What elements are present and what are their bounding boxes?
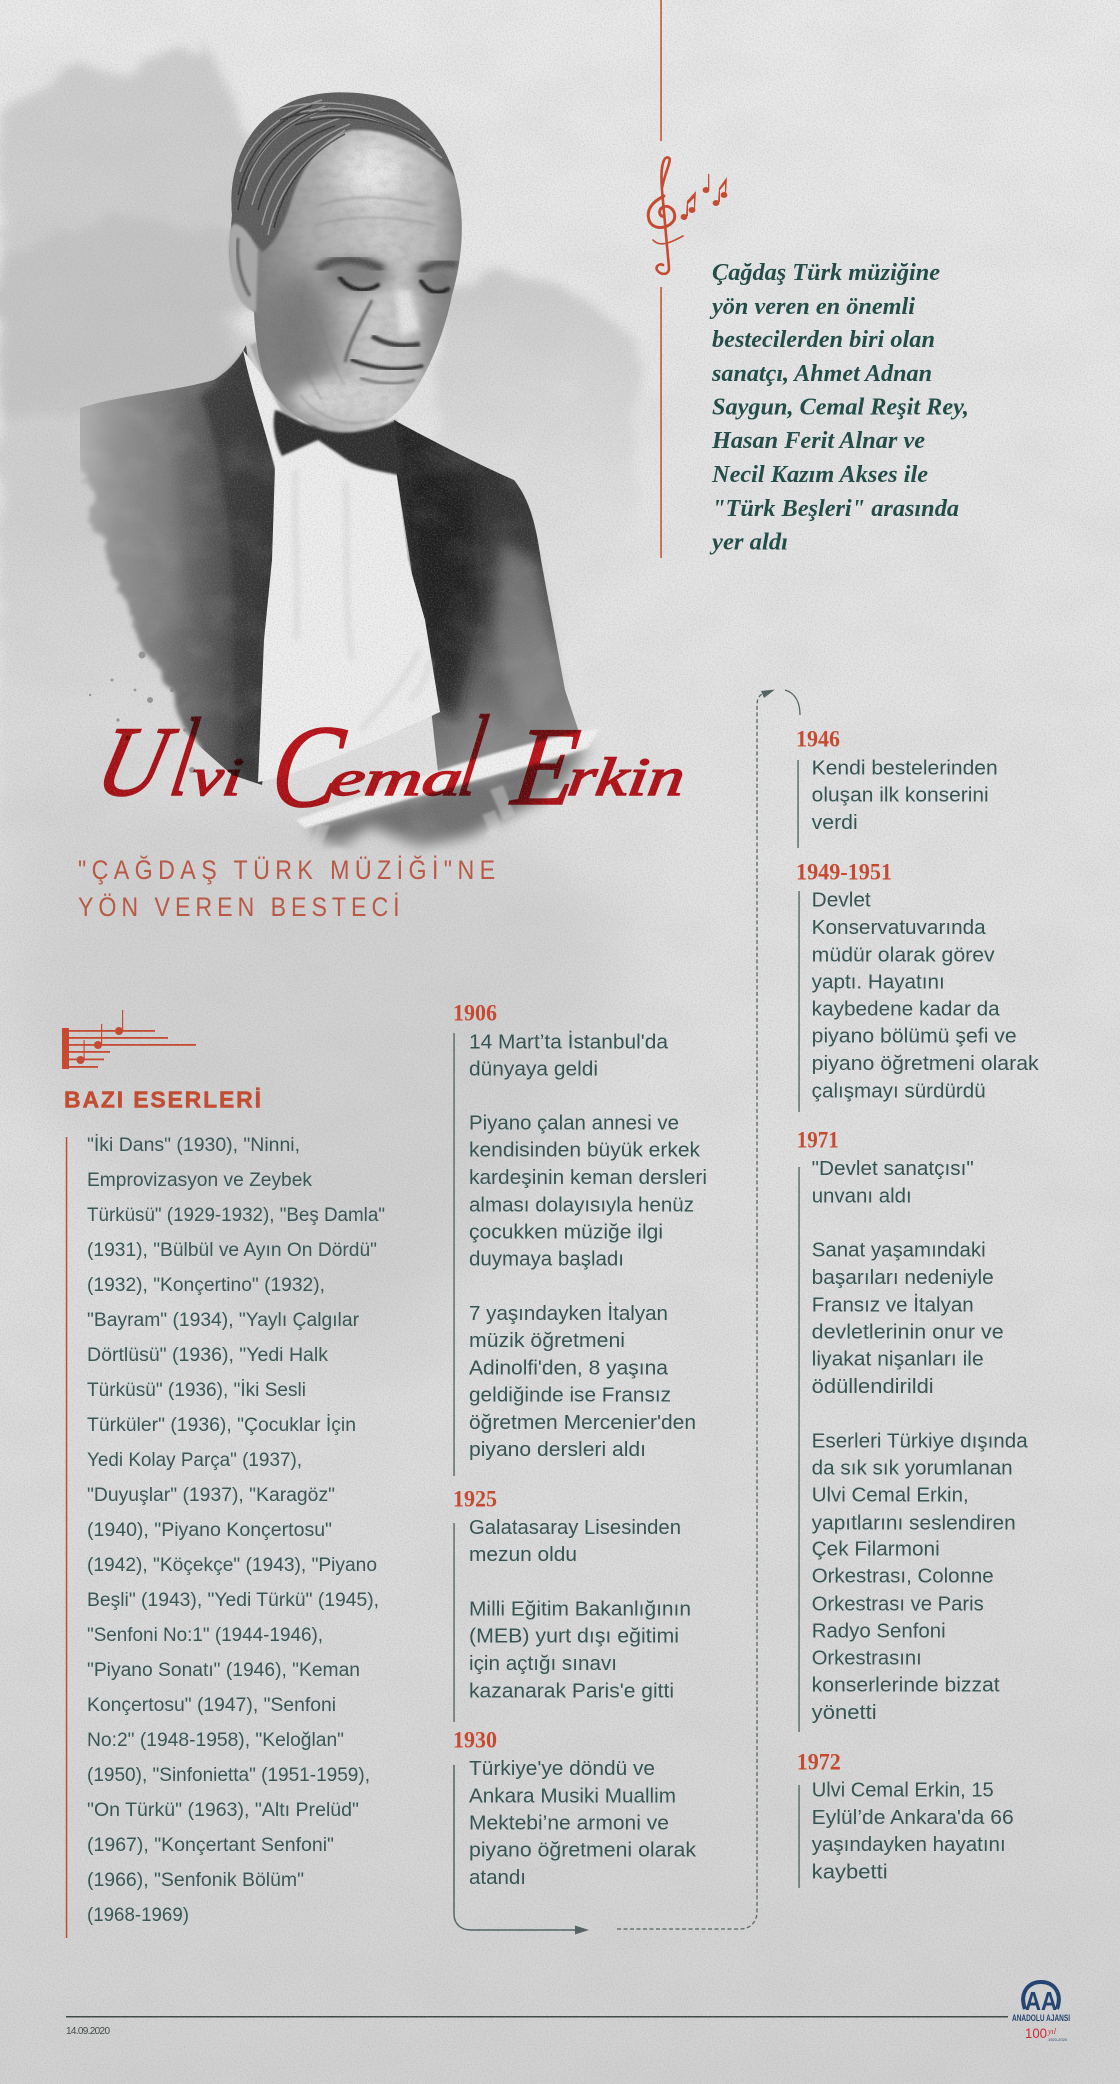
timeline entry 1906: Adinolfi'den, 8 yaşına (469, 1356, 669, 1379)
timeline entry 1949-1951: Konservatuvarında (812, 916, 986, 939)
timeline entry 1972: kaybetti (812, 1860, 888, 1883)
timeline entry 1906: dünyaya geldi (469, 1058, 598, 1081)
timeline entry 1971: Orkestrası ve Paris (812, 1592, 984, 1615)
subtitle (78, 854, 495, 922)
intro quote: yer aldı (709, 530, 788, 556)
panel: works list: (1931), "Bülbül ve Ayın On Dördü" (87, 1240, 377, 1261)
timeline entry 1906: geldiğinde ise Fransız (469, 1384, 671, 1407)
timeline entry 1972: Eylül’de Ankara'da 66 (812, 1806, 1014, 1829)
mouth (352, 360, 422, 369)
eyebrows and eyes (320, 260, 380, 268)
timeline entry 1906: piyano dersleri aldı (469, 1438, 646, 1461)
panel: works list: Türküler" (1936), "Çocuklar İçin (87, 1415, 356, 1436)
panel: works list: "Piyano Sonatı" (1946), "Keman (87, 1660, 360, 1681)
panel: works list: "İki Dans" (1930), "Ninni, (87, 1135, 300, 1156)
intro quote: Necil Kazım Akses ile (711, 462, 928, 488)
subtitle: YÖN VEREN BESTECİ (78, 891, 400, 922)
panel: works list: Konçertosu" (1947), "Senfoni (87, 1695, 336, 1716)
timeline entry 1925: için açtığı sınavı (469, 1652, 617, 1675)
timeline entry 1925: 1925 (453, 1487, 497, 1512)
neck (250, 340, 300, 420)
timeline entry 1906: 14 Mart’ta İstanbul'da (469, 1030, 669, 1053)
title: U (87, 706, 185, 817)
panel: works list: No:2" (1948-1958), "Keloğlan" (87, 1730, 344, 1751)
panel: works list: (1950), "Sinfonietta" (1951-1959), (87, 1765, 370, 1786)
timeline entry 1946: 1946 (796, 727, 840, 752)
timeline entry 1971: Eserleri Türkiye dışında (812, 1429, 1028, 1452)
panel: works list: (1940), "Piyano Konçertosu" (87, 1520, 332, 1541)
jacket and shirt body (60, 345, 620, 860)
vertical red rule top (660, 0, 662, 558)
timeline entry 1930: Mektebi’ne armoni ve (469, 1811, 669, 1834)
title (87, 692, 689, 832)
title: l (451, 692, 496, 821)
timeline entry 1930: atandı (469, 1866, 526, 1889)
timeline entry 1930: Türkiye'ye döndü ve (469, 1757, 655, 1780)
timeline entry 1971: yönetti (812, 1701, 877, 1724)
timeline entry 1971: Orkestrasını (812, 1647, 922, 1670)
intro quote: bestecilerden biri olan (712, 327, 935, 353)
timeline entry 1925: Milli Eğitim Bakanlığının (469, 1598, 691, 1621)
nose (395, 290, 420, 336)
icon: music staff (62, 1010, 196, 1069)
ink wash (0, 40, 640, 1380)
panel: works list: Yedi Kolay Parça" (1937), (87, 1450, 302, 1471)
panel: works list (66, 1135, 385, 1938)
panel: works list: Türküsü" (1936), "İki Sesli (87, 1380, 306, 1401)
timeline entry 1971: yapıtlarını seslendiren (812, 1511, 1016, 1534)
timeline entry 1906: kardeşinin keman dersleri (469, 1166, 707, 1189)
timeline entry 1971: "Devlet sanatçısı" (812, 1157, 974, 1180)
logo: Anadolu Ajansı: yıl (1047, 2027, 1057, 2036)
hands (310, 785, 515, 852)
timeline entry 1906 (453, 1001, 707, 1476)
title: ema (326, 750, 466, 806)
panel: works list: Dörtlüsü" (1936), "Yedi Halk (87, 1345, 329, 1366)
timeline entry 1925: kazanarak Paris'e gitti (469, 1679, 674, 1702)
bow tie (274, 410, 398, 475)
intro quote: Hasan Ferit Alnar ve (711, 428, 925, 454)
panel: works list: Emprovizasyon ve Zeybek (87, 1170, 312, 1191)
timeline entry 1971: Orkestrası, Colonne (812, 1565, 994, 1588)
intro quote: Çağdaş Türk müziğine (712, 260, 940, 286)
panel: works list: "On Türkü" (1963), "Altı Prelüd" (87, 1800, 359, 1821)
arrow: dashed timeline connector (617, 690, 800, 1929)
timeline entry 1930 (453, 1727, 697, 1889)
timeline entry 1972: 1972 (797, 1749, 841, 1774)
timeline entry 1906: Piyano çalan annesi ve (469, 1111, 679, 1134)
timeline entry 1930: 1930 (453, 1727, 497, 1752)
timeline entry 1930: Ankara Musiki Muallim (469, 1784, 676, 1807)
timeline entry 1949-1951: çalışmayı sürdürdü (812, 1079, 986, 1102)
title: E (505, 705, 586, 829)
timeline entry 1971: Çek Filarmoni (812, 1538, 940, 1561)
title: vi (188, 747, 247, 807)
timeline entry 1949-1951: müdür olarak görev (812, 943, 995, 966)
timeline entry 1971: Ulvi Cemal Erkin, (812, 1484, 969, 1507)
timeline entry 1925: mezun oldu (469, 1543, 577, 1566)
timeline entry 1925: (MEB) yurt dışı eğitimi (469, 1625, 679, 1648)
footer rule and date: 14.09.2020 (66, 2026, 110, 2037)
icon: treble clef and notes (648, 157, 727, 274)
timeline entry 1971: unvanı aldı (812, 1184, 912, 1207)
ink splatter (89, 598, 195, 773)
intro quote: yön veren en önemli (709, 294, 915, 320)
timeline entry 1906: öğretmen Mercenier'den (469, 1411, 696, 1434)
timeline entry 1971: liyakat nişanları ile (812, 1348, 984, 1371)
panel: works list: "Duyuşlar" (1937), "Karagöz" (87, 1485, 335, 1506)
panel: works list: (1968-1969) (87, 1905, 189, 1926)
timeline entry 1946: verdi (812, 811, 858, 834)
paper band (296, 728, 600, 828)
timeline entry 1971: da sık sık yorumlanan (812, 1456, 1013, 1479)
title: l (163, 696, 207, 820)
logo: Anadolu Ajansı: 100 (1025, 2025, 1047, 2041)
panel: works list: "Bayram" (1934), "Yaylı Çalgılar (87, 1310, 360, 1331)
timeline entry 1949-1951: piyano bölümü şefi ve (812, 1025, 1017, 1048)
panel: works list: Beşli" (1943), "Yedi Türkü" (1945), (87, 1590, 379, 1611)
panel: works list: (1967), "Konçertant Senfoni" (87, 1835, 334, 1856)
heading: Bazı Eserleri: BAZI ESERLERİ (64, 1086, 261, 1112)
timeline entry 1906: alması dolayısıyla henüz (469, 1193, 694, 1216)
timeline entry 1949-1951: piyano öğretmeni olarak (812, 1052, 1039, 1075)
subtitle: "ÇAĞDAŞ TÜRK MÜZİĞİ"NE (78, 854, 495, 885)
ear (229, 224, 258, 312)
timeline entry 1971: 1971 (797, 1127, 839, 1152)
timeline entry 1949-1951: yaptı. Hayatını (812, 970, 945, 993)
logo: Anadolu Ajansı (1012, 1982, 1070, 2042)
panel: works list: (1966), "Senfonik Bölüm" (87, 1870, 304, 1891)
panel: works list: Türküsü" (1929-1932), "Beş Damla" (87, 1205, 385, 1226)
timeline entry 1930: piyano öğretmeni olarak (469, 1839, 697, 1862)
arrow: solid timeline connector (454, 1765, 589, 1934)
hair (228, 88, 462, 252)
panel: works list: (1942), "Köçekçe" (1943), "Piyano (87, 1555, 377, 1576)
timeline entry 1971: konserlerinde bizzat (812, 1674, 1000, 1697)
portrait photograph (60, 85, 620, 860)
title: rkin (564, 747, 689, 807)
timeline entry 1972: yaşındayken hayatını (812, 1833, 1006, 1856)
timeline entry 1972: Ulvi Cemal Erkin, 15 (812, 1779, 994, 1802)
intro quote (709, 260, 969, 556)
timeline entry 1946: oluşan ilk konserini (812, 784, 989, 807)
intro quote: Saygun, Cemal Reşit Rey, (712, 394, 969, 420)
timeline entry 1971: Sanat yaşamındaki (812, 1239, 986, 1262)
timeline entry 1949-1951: Devlet (812, 889, 871, 912)
head (229, 92, 462, 434)
timeline entry 1906: müzik öğretmeni (469, 1329, 625, 1352)
panel: works list: "Senfoni No:1" (1944-1946), (87, 1625, 323, 1646)
logo: Anadolu Ajansı: AA (1025, 1986, 1057, 2016)
logo: Anadolu Ajansı: ANADOLU AJANSI (1012, 2013, 1070, 2024)
timeline entry 1971: Radyo Senfoni (812, 1620, 946, 1643)
wrinkles (290, 198, 435, 423)
title: C (264, 701, 352, 832)
timeline entry 1949-1951 (796, 859, 1039, 1112)
intro quote: sanatçı, Ahmet Adnan (711, 361, 932, 387)
timeline entry 1946: Kendi bestelerinden (812, 756, 998, 779)
timeline entry 1925: Galatasaray Lisesinden (469, 1516, 681, 1539)
timeline entry 1906: kendisinden büyük erkek (469, 1139, 701, 1162)
timeline entry 1971 (797, 1127, 1028, 1732)
timeline entry 1949-1951: kaybedene kadar da (812, 998, 1000, 1021)
timeline entry 1906: çocukken müziğe ilgi (469, 1220, 663, 1243)
timeline entry 1946 (796, 727, 998, 848)
timeline entry 1925 (453, 1487, 691, 1722)
timeline entry 1971: Fransız ve İtalyan (812, 1293, 974, 1316)
timeline entry 1906: 1906 (453, 1001, 497, 1026)
timeline entry 1906: duymaya başladı (469, 1248, 624, 1271)
intro quote: "Türk Beşleri" arasında (712, 496, 959, 522)
timeline entry 1971: devletlerinin onur ve (812, 1320, 1004, 1343)
timeline entry 1971: başarıları nedeniyle (812, 1266, 994, 1289)
timeline entry 1906: 7 yaşındayken İtalyan (469, 1302, 668, 1325)
timeline entry 1971: ödüllendirildi (812, 1375, 934, 1398)
panel: works list: (1932), "Konçertino" (1932), (87, 1275, 325, 1296)
timeline entry 1949-1951: 1949-1951 (796, 859, 892, 884)
timeline entry 1972 (797, 1749, 1014, 1888)
logo: Anadolu Ajansı: 1920-2020 (1048, 2037, 1068, 2042)
